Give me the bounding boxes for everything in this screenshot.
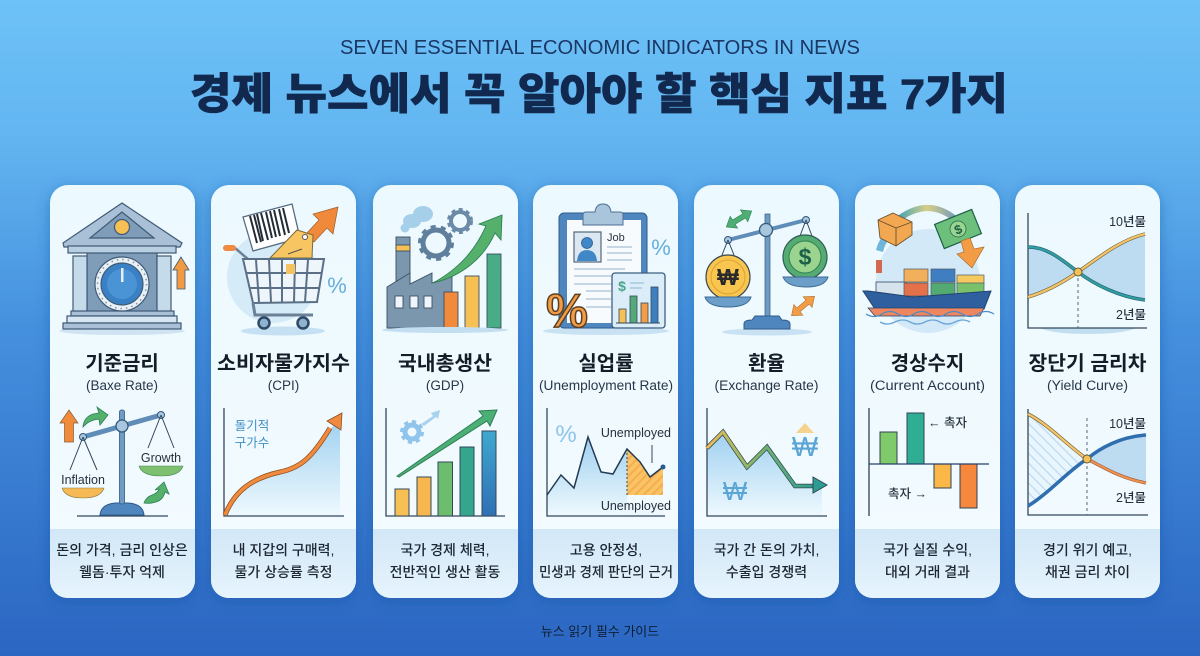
- description: 웰돔·투자 억제: [79, 564, 165, 580]
- heading: 기준금리: [85, 352, 159, 375]
- english label: (GDP): [426, 378, 464, 393]
- description: 민생과 경제 판단의 근거: [539, 564, 673, 580]
- chart: price curve: [224, 408, 344, 516]
- english label: (Yield Curve): [1047, 378, 1128, 393]
- heading: 환율: [748, 352, 785, 375]
- description: 전반적인 생산 활동: [390, 564, 501, 580]
- chart: yield crossover top: 2년물: [1116, 308, 1146, 322]
- chart: unemployment area: Unemployed: [601, 499, 671, 513]
- heading: 경상수지: [891, 352, 964, 375]
- ground line: [382, 327, 508, 333]
- heading: 소비자물가지수: [217, 352, 350, 375]
- icon: shopping cart with price tag: [223, 204, 338, 336]
- english label: (Exchange Rate): [714, 378, 818, 393]
- description: 국가 경제 체력,: [401, 542, 489, 558]
- icon: bank with vault dial: [59, 203, 185, 335]
- chart: rising bars: [386, 408, 505, 516]
- icon: clipboard resume: Job: [607, 232, 625, 244]
- icon: currency scale: [705, 205, 828, 336]
- icon: clipboard resume: [543, 204, 669, 337]
- description: 돈의 가격, 금리 인상은: [56, 542, 188, 558]
- chart: yield crossover top: [1028, 213, 1147, 334]
- chart: surplus and deficit bars: 촉자 →: [888, 487, 927, 501]
- icon: clipboard resume: $: [618, 278, 626, 294]
- footer: 뉴스 읽기 필수 가이드: [541, 624, 659, 639]
- english label: (Baxe Rate): [86, 378, 158, 393]
- chart: exchange line: ₩: [792, 431, 819, 462]
- icon: cargo ship: $: [952, 221, 965, 238]
- chart: balance scale: Inflation: [61, 473, 105, 487]
- icon: clipboard resume: %: [546, 284, 588, 337]
- panel: current account: [855, 185, 1000, 598]
- chart: yield crossover bottom: 2년물: [1116, 491, 1146, 505]
- english label: (CPI): [268, 378, 299, 393]
- heading: 실업률: [578, 352, 634, 375]
- description: 물가 상승률 측정: [235, 564, 332, 580]
- chart: surplus and deficit bars: [869, 408, 989, 516]
- icon: cargo ship: [863, 208, 994, 333]
- english label: (Current Account): [870, 378, 985, 393]
- icon: up arrow: [173, 257, 189, 289]
- icon: percent: %: [651, 235, 671, 260]
- chart: yield crossover top: 10년물: [1109, 215, 1146, 229]
- chart: unemployment area: %: [555, 421, 577, 448]
- title: 경제 뉴스에서 꼭 알아야 할 핵심 지표 7가지: [190, 71, 1008, 119]
- description: 내 지갑의 구매력,: [233, 542, 334, 558]
- panel: exchange rate: [694, 185, 839, 598]
- chart: unemployment area: [547, 408, 671, 516]
- description: 대외 거래 결과: [885, 564, 970, 580]
- description: 국가 실질 수익,: [883, 542, 972, 558]
- chart: surplus and deficit bars: ← 촉자: [928, 416, 967, 430]
- description: 수출입 경쟁력: [726, 564, 807, 580]
- chart: exchange line: ₩: [723, 476, 748, 506]
- chart: unemployment area: Unemployed: [601, 426, 671, 440]
- panel: CPI: [211, 185, 356, 598]
- panel: yield curve: [1015, 185, 1160, 598]
- panel: GDP: [373, 185, 518, 598]
- description: 채권 금리 차이: [1045, 564, 1130, 580]
- panel: unemployment: [533, 185, 678, 598]
- description: 고용 안정성,: [570, 542, 642, 558]
- english label: (Unemployment Rate): [539, 378, 673, 393]
- heading: 장단기 금리차: [1028, 352, 1146, 375]
- chart: yield crossover bottom: [1028, 409, 1148, 515]
- description: 경기 위기 예고,: [1043, 542, 1132, 558]
- icon: currency scale: ₩: [717, 264, 739, 290]
- panel: base rate: [50, 185, 195, 598]
- chart: price curve: 돌기적: [235, 419, 269, 433]
- icon: factory with gears and bars: [387, 206, 502, 328]
- icon: currency scale: $: [799, 244, 812, 270]
- description: 국가 간 돈의 가치,: [714, 542, 819, 558]
- heading: 국내총생산: [398, 352, 492, 375]
- subtitle: SEVEN ESSENTIAL ECONOMIC INDICATORS IN NEWS: [340, 37, 860, 59]
- chart: balance scale: [60, 407, 183, 516]
- chart: price curve: 구가수: [235, 436, 269, 450]
- icon: percent: %: [327, 273, 347, 298]
- chart: exchange line: [707, 408, 827, 516]
- chart: yield crossover bottom: 10년물: [1109, 417, 1146, 431]
- chart: balance scale: Growth: [141, 451, 181, 465]
